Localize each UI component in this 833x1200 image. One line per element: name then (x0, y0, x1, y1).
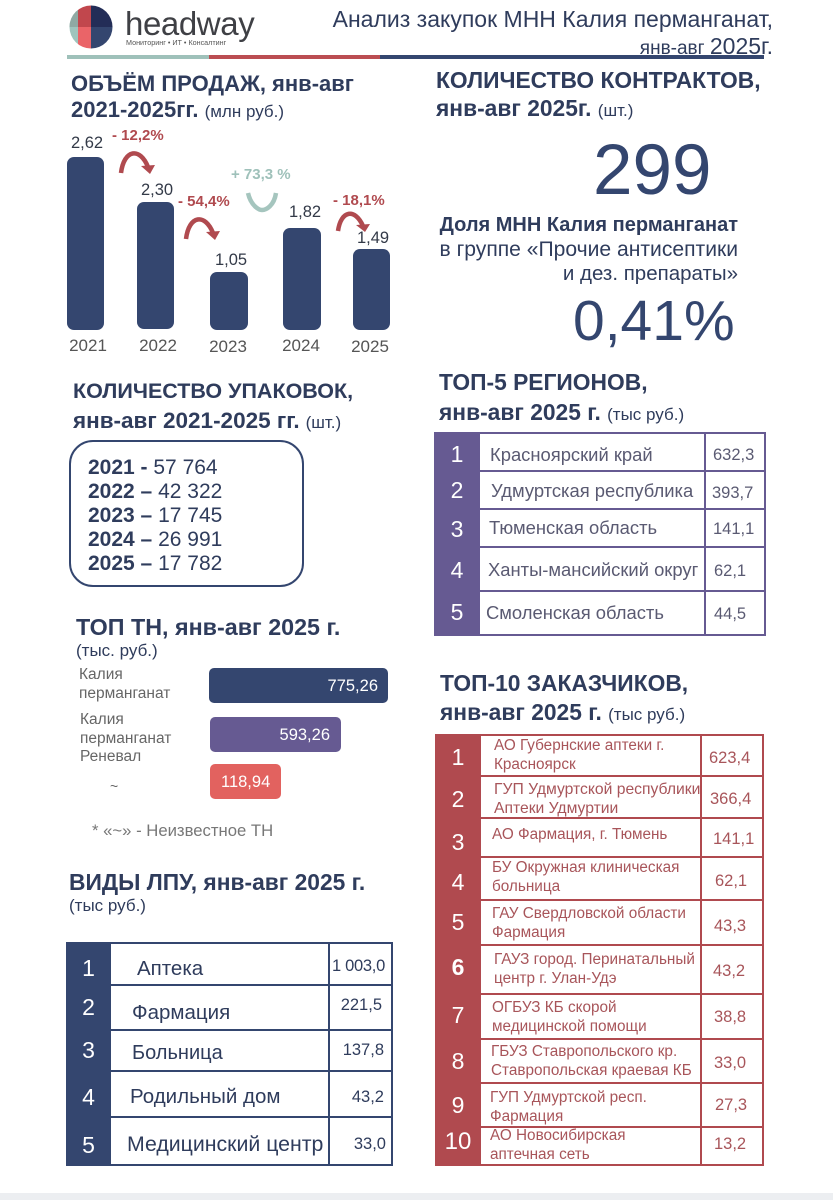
table: top customers: 623,4 (709, 749, 750, 767)
bar chart: sales: 2023 (209, 337, 247, 356)
arrows (118, 151, 370, 240)
table: LPU types: Фармация (132, 1001, 230, 1024)
heading: contracts: янв-авг 2025г. (шт.) (436, 95, 633, 121)
heading: top regions: янв-авг 2025 г. (тыс руб.) (439, 399, 684, 425)
bar chart: sales (67, 127, 390, 356)
table: top customers: 5 (452, 909, 464, 935)
bar chart: sales: 1,49 (357, 229, 389, 247)
table: top regions: 3 (451, 516, 463, 542)
heading: packages (73, 379, 353, 433)
share text (440, 214, 738, 285)
bar chart: sales: 2021 (69, 336, 107, 355)
packages box: 2025 – 17 782 (88, 552, 222, 575)
horizontal bar chart: Реневал (80, 748, 141, 765)
table: top customers: Красноярск (494, 756, 576, 772)
table: LPU types: Медицинский центр (127, 1132, 323, 1156)
horizontal bar chart (79, 666, 388, 799)
big number: share: 0,41% (573, 289, 735, 353)
table: LPU types: 43,2 (352, 1088, 384, 1106)
report title: янв-авг 2025г. (640, 33, 773, 59)
bar chart: sales: 2,30 (141, 181, 173, 199)
table: top customers: 2 (452, 786, 464, 812)
unit note: (тыс руб.) (69, 896, 146, 915)
table: top customers: 62,1 (715, 872, 747, 890)
table: top regions: 4 (451, 557, 463, 583)
horizontal bar chart: перманганат (80, 730, 171, 746)
table: top regions: 2 (451, 477, 463, 503)
packages box (69, 440, 304, 587)
header logo (70, 5, 255, 48)
table: LPU types: 1 003,0 (332, 957, 385, 975)
bar chart: sales: + 73,3 % (231, 166, 291, 183)
table: top customers: 13,2 (714, 1135, 746, 1153)
table: top customers: АО Губернские аптеки г. (494, 737, 664, 754)
bar chart: sales: 2,62 (71, 134, 103, 152)
table: LPU types: 33,0 (354, 1135, 386, 1153)
table: top regions: 62,1 (714, 562, 746, 580)
table: top customers: 4 (452, 869, 464, 895)
table: top regions: 5 (451, 599, 463, 625)
table: top customers: ГАУ Свердловской области (492, 905, 686, 922)
logo wordmark: headway (125, 5, 254, 42)
bar chart: sales: 2022 (139, 336, 177, 355)
heading: sales (71, 71, 354, 122)
packages box: 2023 – 17 745 (88, 504, 222, 527)
table: top customers: 38,8 (714, 1008, 746, 1026)
heading: LPU types: ВИДЫ ЛПУ, янв-авг 2025 г. (69, 869, 365, 895)
table: top customers (435, 734, 764, 1166)
heading: contracts (436, 67, 761, 121)
heading: top regions (439, 369, 684, 425)
table: top customers: ГБУЗ Ставропольского кр. (491, 1043, 677, 1060)
table: top customers: АО Новосибирская (490, 1127, 626, 1144)
table: top customers: 33,0 (714, 1054, 746, 1072)
packages box: 2021 - 57 764 (88, 456, 218, 479)
table: top regions: Красноярский край (490, 444, 653, 465)
table: top regions: 141,1 (713, 520, 754, 538)
packages box: 2022 – 42 322 (88, 480, 222, 503)
table: top customers: 8 (452, 1048, 464, 1074)
table: top customers: Аптеки Удмуртии (494, 800, 618, 816)
table: top customers: 141,1 (713, 830, 754, 848)
table: top customers: ГУП Удмуртской республики (494, 781, 700, 798)
report title: Анализ закупок МНН Калия перманганат, (333, 6, 773, 32)
horizontal bar chart: Калия (79, 666, 123, 683)
table: LPU types: Родильный дом (130, 1085, 280, 1108)
table: LPU types: 5 (82, 1132, 95, 1158)
horizontal bar chart: перманганат (79, 685, 170, 702)
bar chart: sales: 2024 (282, 336, 320, 355)
horizontal bar chart: Калия (80, 711, 124, 728)
heading: packages: КОЛИЧЕСТВО УПАКОВОК, (73, 379, 353, 403)
table: top customers: Фармация (490, 1108, 563, 1124)
bar 2021 (67, 157, 104, 330)
heading: top customers: янв-авг 2025 г. (тыс руб.) (440, 698, 685, 724)
table: top customers: 9 (452, 1092, 464, 1118)
bar chart: sales: 1,82 (289, 203, 321, 221)
table: top customers: Фармация (492, 924, 565, 940)
heading: top customers: ТОП-10 ЗАКАЗЧИКОВ, (440, 670, 688, 696)
table: top regions: 632,3 (713, 446, 754, 464)
bar chart: sales: 2025 (351, 337, 389, 356)
heading: top trade names: ТОП ТН, янв-авг 2025 г. (76, 614, 340, 640)
table: top customers: аптечная сеть (490, 1146, 590, 1162)
horizontal bar chart: 593,26 (280, 726, 330, 744)
table: LPU types: 3 (82, 1037, 95, 1063)
table: top regions: 44,5 (714, 605, 746, 623)
heading: top customers (440, 670, 688, 724)
unit note: (тыс. руб.) (76, 641, 158, 660)
bar chart: sales: - 54,4% (178, 193, 230, 210)
table: top regions: 1 (451, 441, 463, 467)
table: top customers: больница (492, 878, 560, 894)
header rule (67, 55, 764, 59)
table: top customers: 43,3 (714, 917, 746, 935)
table: LPU types: 1 (82, 955, 95, 981)
heading: packages: янв-авг 2021-2025 гг. (шт.) (73, 408, 341, 433)
report title (332, 6, 773, 59)
heading: sales: ОБЪЁМ ПРОДАЖ, янв-авг (71, 71, 354, 96)
table: top customers: ГУП Удмуртской респ. (490, 1089, 647, 1106)
packages box: 2024 – 26 991 (88, 528, 222, 551)
icon: logo circle (70, 6, 112, 48)
table: top regions: Удмуртская республика (491, 480, 693, 501)
heading: contracts: КОЛИЧЕСТВО КОНТРАКТОВ, (436, 67, 761, 93)
table: LPU types (66, 942, 393, 1166)
table: top regions: Тюменская область (489, 517, 657, 538)
bottom strip (0, 1193, 833, 1200)
table: top regions (434, 432, 766, 636)
table: top regions: Смоленская область (486, 602, 664, 623)
table: LPU types: Больница (132, 1042, 223, 1064)
heading: top regions: ТОП-5 РЕГИОНОВ, (439, 369, 648, 395)
table: top customers: ГАУЗ город. Перинатальный (494, 951, 695, 968)
heading: sales: 2021-2025гг. (млн руб.) (71, 97, 284, 122)
table: LPU types: 137,8 (343, 1041, 384, 1059)
horizontal bar chart: 118,94 (221, 773, 270, 791)
table: LPU types: Аптека (137, 957, 203, 980)
share text: Доля МНН Калия перманганат (440, 214, 738, 236)
big number: contracts: 299 (593, 131, 711, 210)
share text: в группе «Прочие антисептики (440, 238, 738, 261)
horizontal bar chart: ~ (110, 778, 118, 794)
table: top customers: Ставропольская краевая КБ (491, 1062, 692, 1078)
table: top customers: 43,2 (713, 962, 745, 980)
table: top customers: медицинской помощи (492, 1018, 647, 1034)
bar chart: sales: - 18,1% (333, 192, 385, 209)
horizontal bar chart: 775,26 (328, 677, 378, 695)
share text: и дез. препараты» (563, 262, 738, 285)
bar chart: sales: - 12,2% (112, 127, 164, 144)
table: top customers: БУ Окружная клиническая (492, 859, 679, 876)
table: top customers: 1 (452, 744, 464, 770)
bar chart: sales: 1,05 (215, 251, 247, 269)
table: top regions: 393,7 (712, 484, 753, 502)
table: top customers: центр г. Улан-Удэ (494, 970, 617, 986)
table: top customers: 3 (452, 829, 464, 855)
table: top customers: 27,3 (715, 1096, 747, 1114)
footnote: * «~» - Неизвестное ТН (92, 821, 273, 840)
table: top customers: 6 (452, 954, 464, 980)
table: top customers: АО Фармация, г. Тюмень (492, 826, 667, 843)
table: top customers: 10 (445, 1128, 471, 1155)
table: LPU types: 4 (82, 1084, 95, 1110)
table: LPU types: 2 (82, 994, 95, 1020)
table: top customers: ОГБУЗ КБ скорой (492, 999, 617, 1016)
logo tagline: Мониторинг • ИТ • Консалтинг (126, 38, 226, 47)
table: top customers: 7 (452, 1002, 464, 1028)
table: top regions: Ханты-мансийский округ (488, 559, 698, 580)
table: top customers: 366,4 (710, 790, 751, 808)
table: LPU types: 221,5 (341, 996, 382, 1014)
